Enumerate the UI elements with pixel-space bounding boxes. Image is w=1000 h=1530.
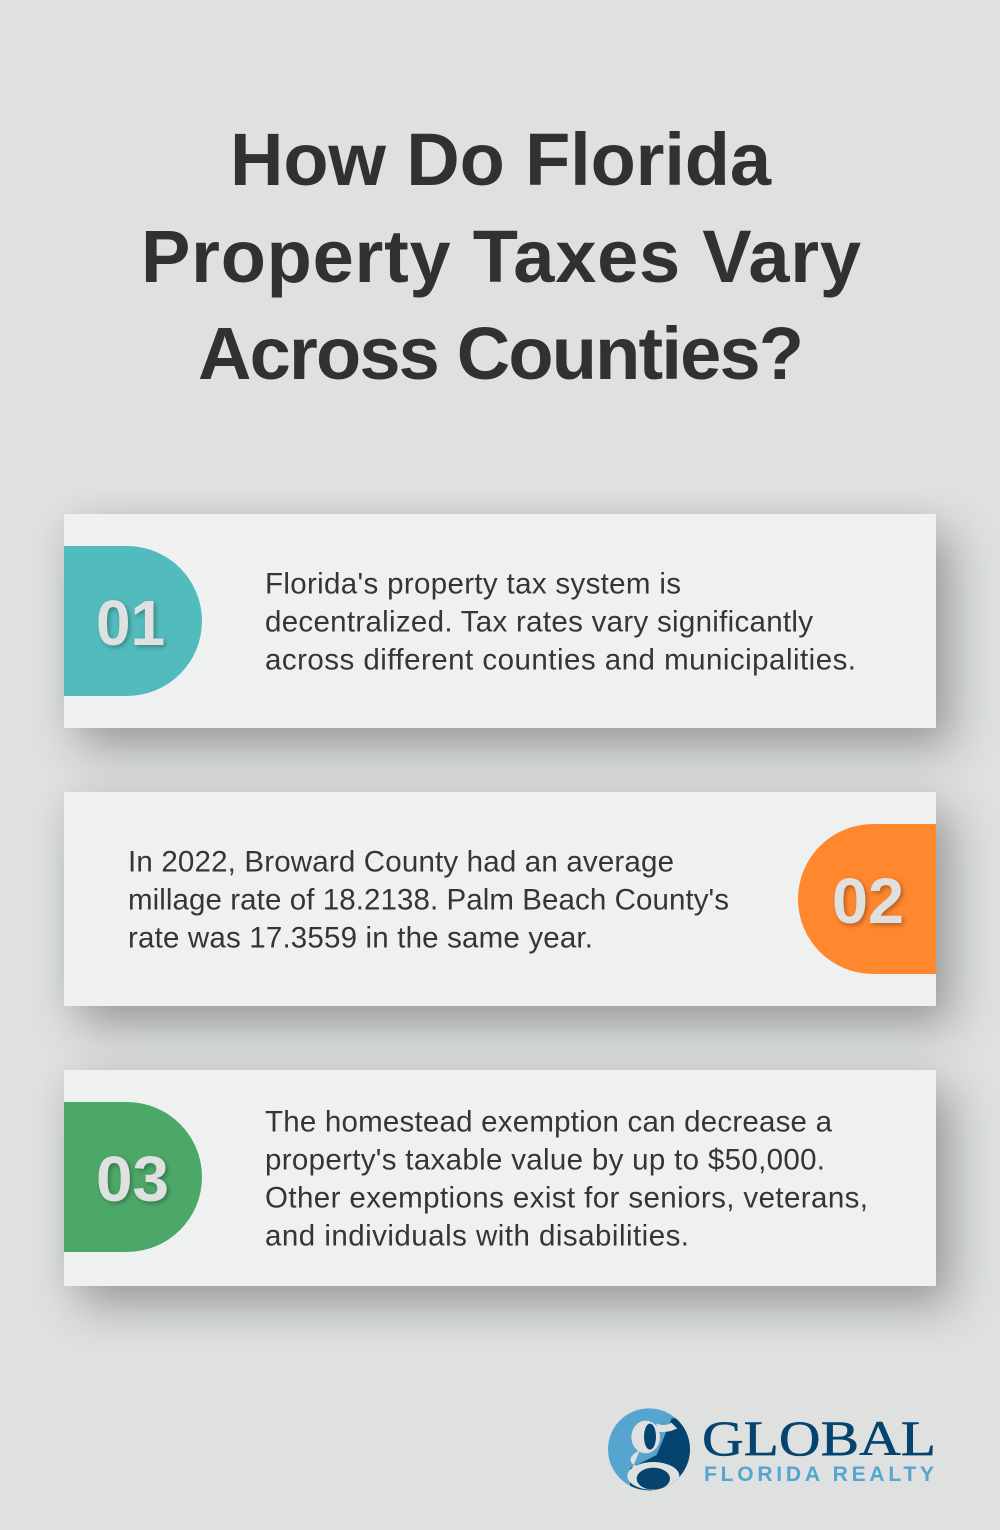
text block 3: and individuals with disabilities. — [265, 1220, 689, 1252]
text block 1: across different counties and municipalities. — [265, 644, 856, 676]
number 03: 03 — [96, 1143, 169, 1215]
text block 2: In 2022, Broward County had an average — [128, 846, 674, 878]
panel: card 1 background — [64, 514, 936, 728]
logo: Global Florida Realty — [608, 1408, 936, 1493]
wordmark: GLOBAL: GLOBAL — [702, 1410, 936, 1466]
panel: card 3 background — [64, 1070, 936, 1286]
content layer — [98, 131, 934, 1490]
text block 1: decentralized. Tax rates vary significantly — [265, 606, 813, 638]
wordmark: FLORIDA REALTY: FLORIDA REALTY — [704, 1463, 934, 1486]
text block 1 — [265, 568, 856, 676]
text block 2: millage rate of 18.2138. Palm Beach County's — [128, 884, 729, 916]
title: Across Counties? — [198, 312, 804, 395]
title: How Do Florida — [230, 118, 772, 201]
number 01: 01 — [96, 587, 165, 659]
title — [141, 118, 861, 395]
text block 2: rate was 17.3559 in the same year. — [128, 922, 593, 954]
text block 2 — [128, 846, 729, 954]
panel: card 2 background — [64, 792, 936, 1006]
text block 1: Florida's property tax system is — [265, 568, 681, 600]
icon: g globe — [608, 1408, 693, 1493]
text block 3 — [265, 1106, 868, 1252]
title: Property Taxes Vary — [141, 215, 861, 298]
text block 3: property's taxable value by up to $50,000. — [265, 1144, 825, 1176]
number 02: 02 — [832, 865, 904, 937]
text block 3: The homestead exemption can decrease a — [265, 1106, 833, 1138]
text block 3: Other exemptions exist for seniors, veterans, — [265, 1182, 868, 1214]
